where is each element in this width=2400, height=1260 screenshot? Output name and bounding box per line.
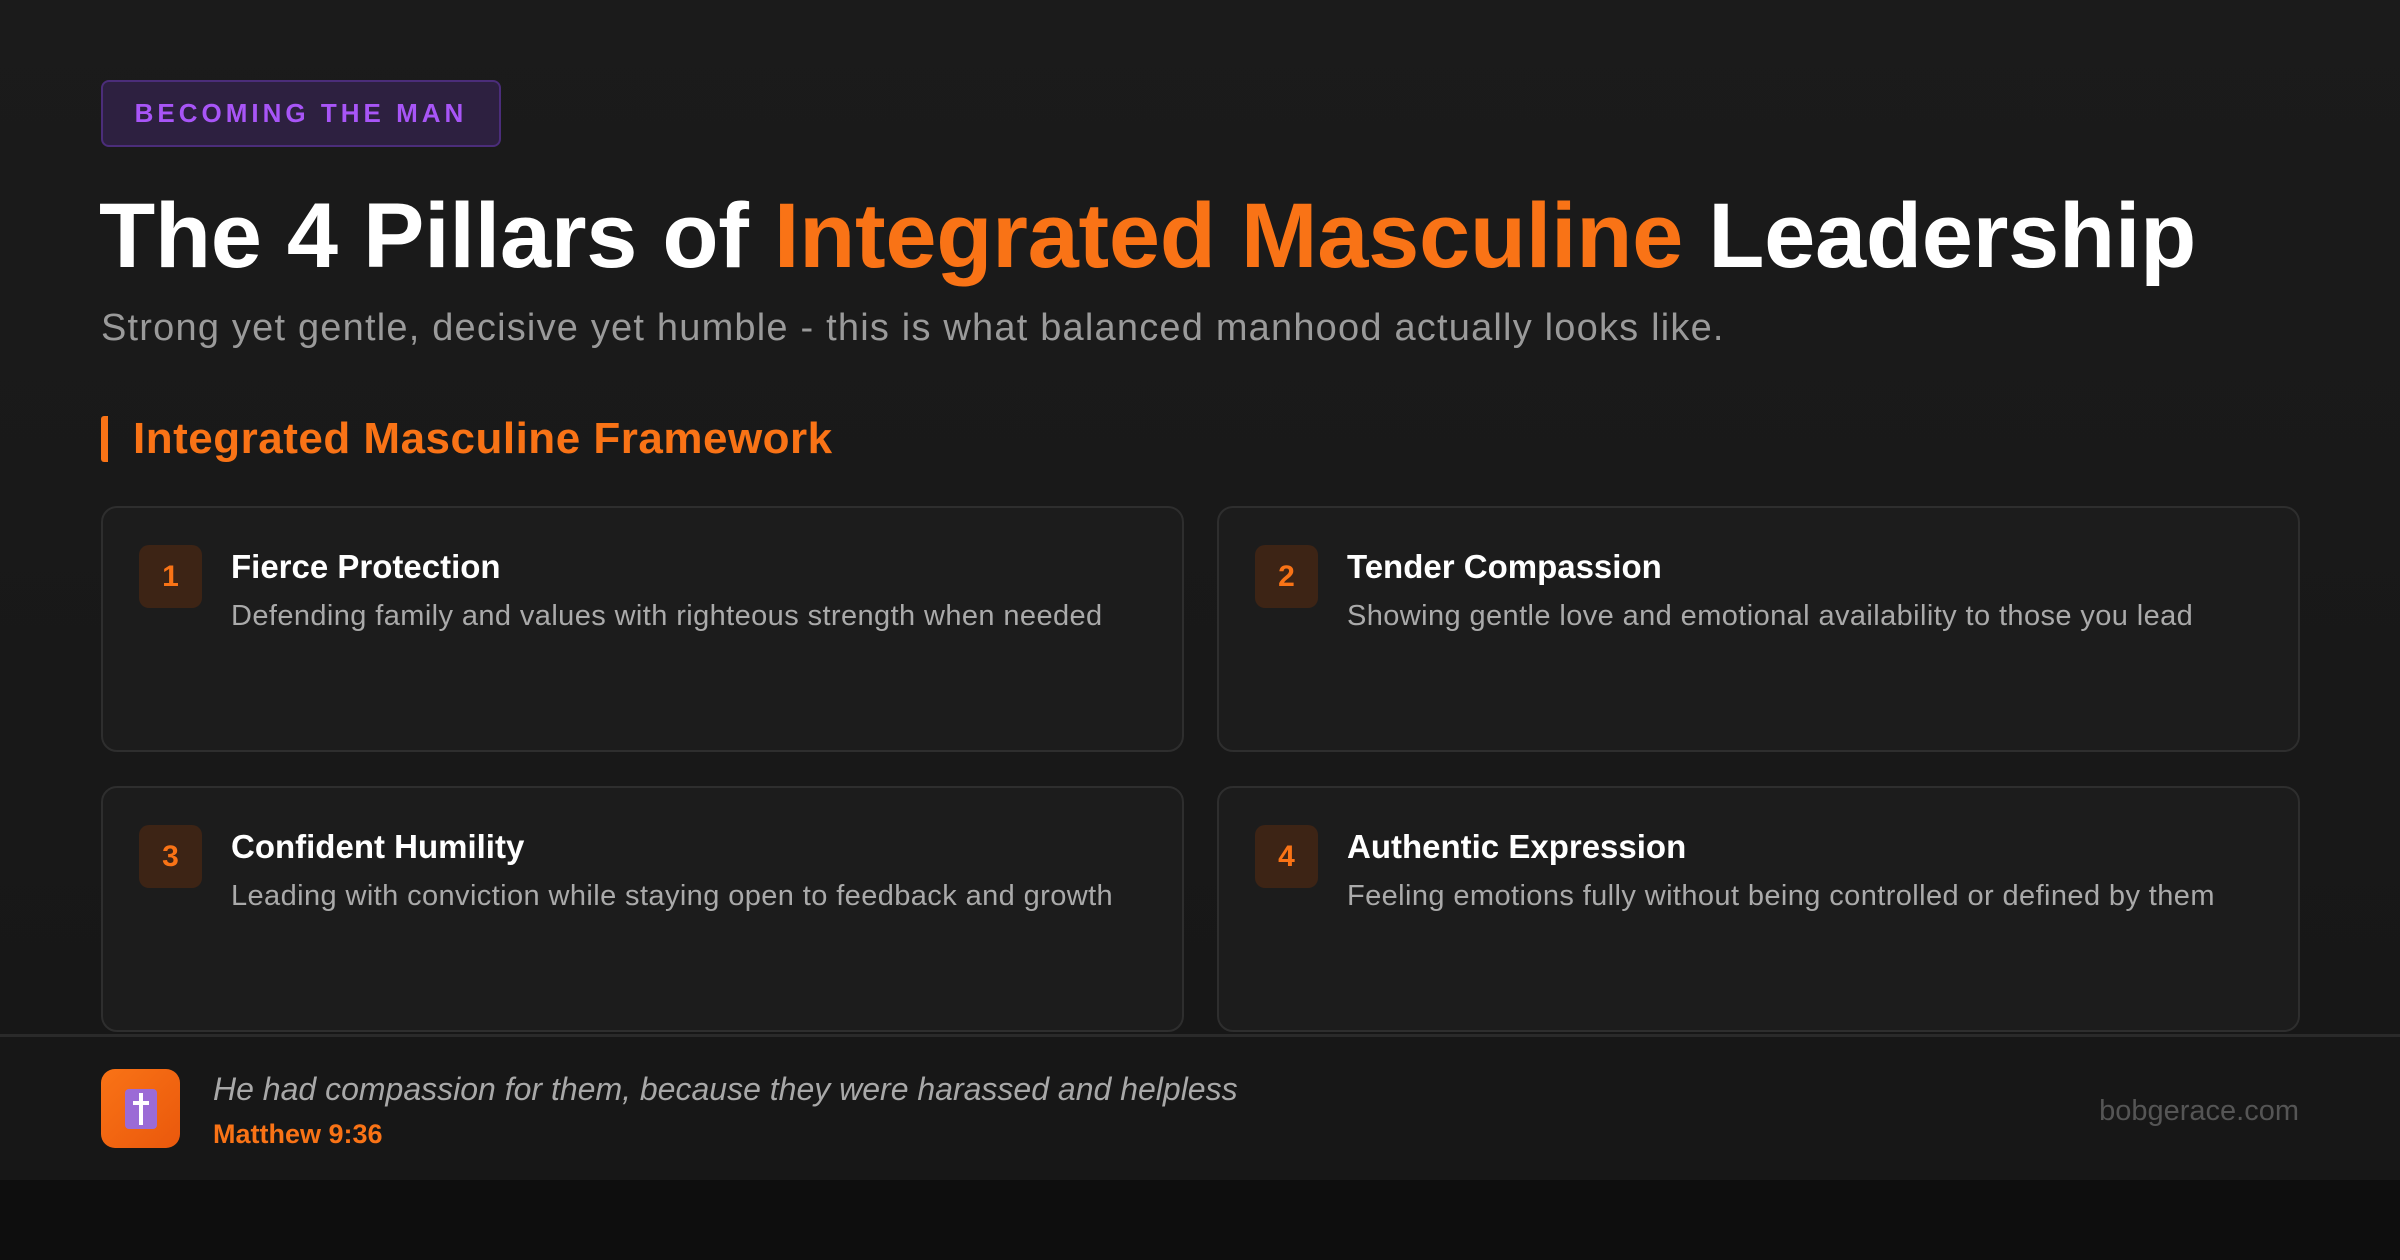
card desc 2: Showing gentle love and emotional availability to those you lead (1347, 600, 2193, 632)
card title 2: Tender Compassion (1347, 548, 1662, 585)
number 3: 3 (162, 840, 179, 872)
card 3 (101, 786, 1184, 1032)
card desc 1: Defending family and values with righteous strength when needed (231, 600, 1103, 632)
card title 1: Fierce Protection (231, 548, 501, 585)
card 4 (1217, 786, 2300, 1032)
footer (0, 1034, 2400, 1180)
card desc 4: Feeling emotions fully without being controlled or defined by them (1347, 880, 2215, 912)
subtitle: Strong yet gentle, decisive yet humble - this is what balanced manhood actually looks like. (101, 307, 1725, 349)
number 4: 4 (1278, 840, 1295, 872)
card desc 3: Leading with conviction while staying open to feedback and growth (231, 880, 1113, 912)
card title 3: Confident Humility (231, 828, 524, 865)
website: bobgerace.com (2099, 1095, 2299, 1127)
card title 4: Authentic Expression (1347, 828, 1686, 865)
badge: BECOMING THE MAN (135, 98, 467, 128)
reference: Matthew 9:36 (213, 1119, 383, 1149)
number 2: 2 (1278, 560, 1295, 592)
badge (101, 80, 501, 147)
title: The 4 Pillars of Integrated Masculine Leadership (99, 185, 2196, 287)
number 4 (1255, 825, 1318, 888)
card 1 (101, 506, 1184, 752)
section heading: Integrated Masculine Framework (133, 414, 833, 463)
number 1 (139, 545, 202, 608)
number 3 (139, 825, 202, 888)
number 1: 1 (162, 560, 179, 592)
icon: cross (101, 1069, 180, 1148)
number 2 (1255, 545, 1318, 608)
card 2 (1217, 506, 2300, 752)
quote: He had compassion for them, because they were harassed and helpless (213, 1071, 1238, 1107)
